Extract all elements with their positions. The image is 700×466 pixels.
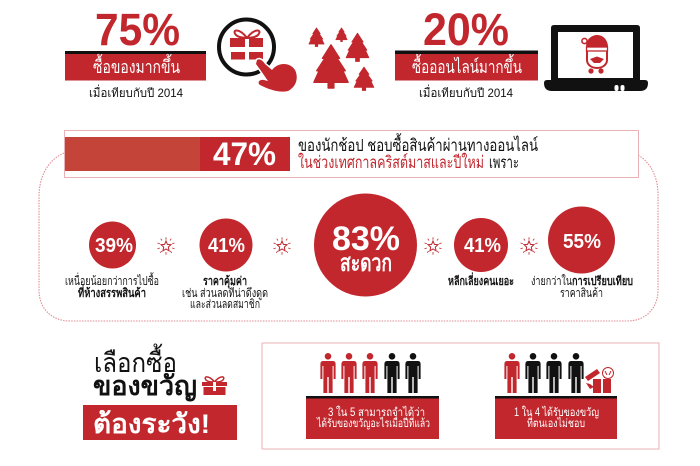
comparison note: เมื่อเทียบกับปี 2014 xyxy=(89,84,183,100)
stat card: 1 of 4: ที่ตนเองไม่ชอบ xyxy=(527,415,585,430)
red banner xyxy=(65,54,206,80)
heading: choose gifts carefully: เลือกซื้อ xyxy=(94,343,177,378)
reason: 55% compare: 55% xyxy=(563,231,601,253)
reason: 83% convenient xyxy=(314,194,417,296)
reason: 55% compare: การเปรียบเทียบ xyxy=(572,274,633,288)
heading: choose gifts carefully: ของขวัญ xyxy=(93,371,197,402)
black rule xyxy=(395,50,538,54)
black rule xyxy=(65,51,206,54)
people: 3 of 5 xyxy=(320,353,421,393)
stat: 20% buy online more xyxy=(395,4,538,100)
number 47%: 47% xyxy=(213,136,276,172)
icon: unwanted gift xyxy=(585,368,614,393)
stat: 75% buy more xyxy=(65,4,206,100)
number 75%: 75% xyxy=(95,4,180,55)
people: 1 of 4 xyxy=(504,353,584,393)
stat card: 1 of 4 xyxy=(495,396,617,439)
headline line 1: ของนักช้อป ชอบซื้อสินค้าผ่านทางออนไลน์ xyxy=(298,133,538,155)
reason: 83% convenient: สะดวก xyxy=(340,250,392,277)
reason: 41% value: เช่น ส่วนลดที่น่าดึงดูด xyxy=(182,284,268,301)
warning banner xyxy=(83,405,237,440)
reason: 41% value: ราคาคุ้มค่า xyxy=(203,274,247,289)
reason: 55% compare xyxy=(531,206,633,300)
icon: gift with pointing hand xyxy=(219,20,297,92)
reason: 39%: ที่ห้างสรรพสินค้า xyxy=(78,284,146,300)
reason: 41% value: และส่วนลดสมาชิก xyxy=(190,297,260,311)
stat card: 1 of 4: 1 ใน 4 ได้รับของขวัญ xyxy=(514,406,599,419)
stat card: 3 of 5: 3 ใน 5 สามารถจำได้ว่า xyxy=(328,406,425,419)
icon: star xyxy=(158,237,174,255)
icon: laptop with santa xyxy=(544,25,648,91)
heading: choose gifts carefully xyxy=(83,343,237,440)
icon: star xyxy=(424,237,442,255)
stat card: 3 of 5 xyxy=(306,396,439,439)
banner text: ซื้อออนไลน์มากขึ้น xyxy=(412,54,522,77)
reason: 83% convenient: 83% xyxy=(332,220,400,258)
red banner xyxy=(395,54,538,80)
icon: small gift xyxy=(202,377,227,395)
icon: star xyxy=(520,237,538,255)
reason: 41% avoid crowds: หลีกเลี่ยงคนเยอะ xyxy=(448,272,514,288)
icon: star xyxy=(274,237,290,255)
dotted reasons panel outline xyxy=(39,153,658,321)
icon: christmas trees xyxy=(309,28,374,90)
headline line 2 black: เพราะ xyxy=(489,153,519,172)
reason: 41% avoid crowds: 41% xyxy=(464,235,501,257)
progress bar xyxy=(65,137,200,171)
reason: 41% value: 41% xyxy=(208,235,245,257)
reason: 55% compare: ง่ายกว่าใน xyxy=(531,274,572,288)
reason: 39% xyxy=(65,222,159,300)
comparison note: เมื่อเทียบกับปี 2014 xyxy=(419,84,513,100)
stat card: 3 of 5: ได้รับของขวัญอะไรเมื่อปีที่แล้ว xyxy=(316,415,430,430)
heading: choose gifts carefully: ต้องระวัง! xyxy=(93,409,210,439)
reason: 39%: เหนื่อยน้อยกว่าการไปซื้อ xyxy=(65,272,159,288)
banner text: ซื้อของมากขึ้น xyxy=(93,54,180,77)
panel: gift statistics xyxy=(262,343,659,449)
reason: 55% compare: ราคาสินค้า xyxy=(560,286,603,300)
reason: 41% avoid crowds xyxy=(448,218,514,288)
reason: 41% value xyxy=(182,218,268,311)
panel: 47% headline xyxy=(64,130,638,178)
reason: 39%: 39% xyxy=(95,235,133,257)
number 20%: 20% xyxy=(423,4,509,55)
headline line 2 red: ในช่วงเทศกาลคริสต์มาสและปีใหม่ xyxy=(298,152,484,172)
